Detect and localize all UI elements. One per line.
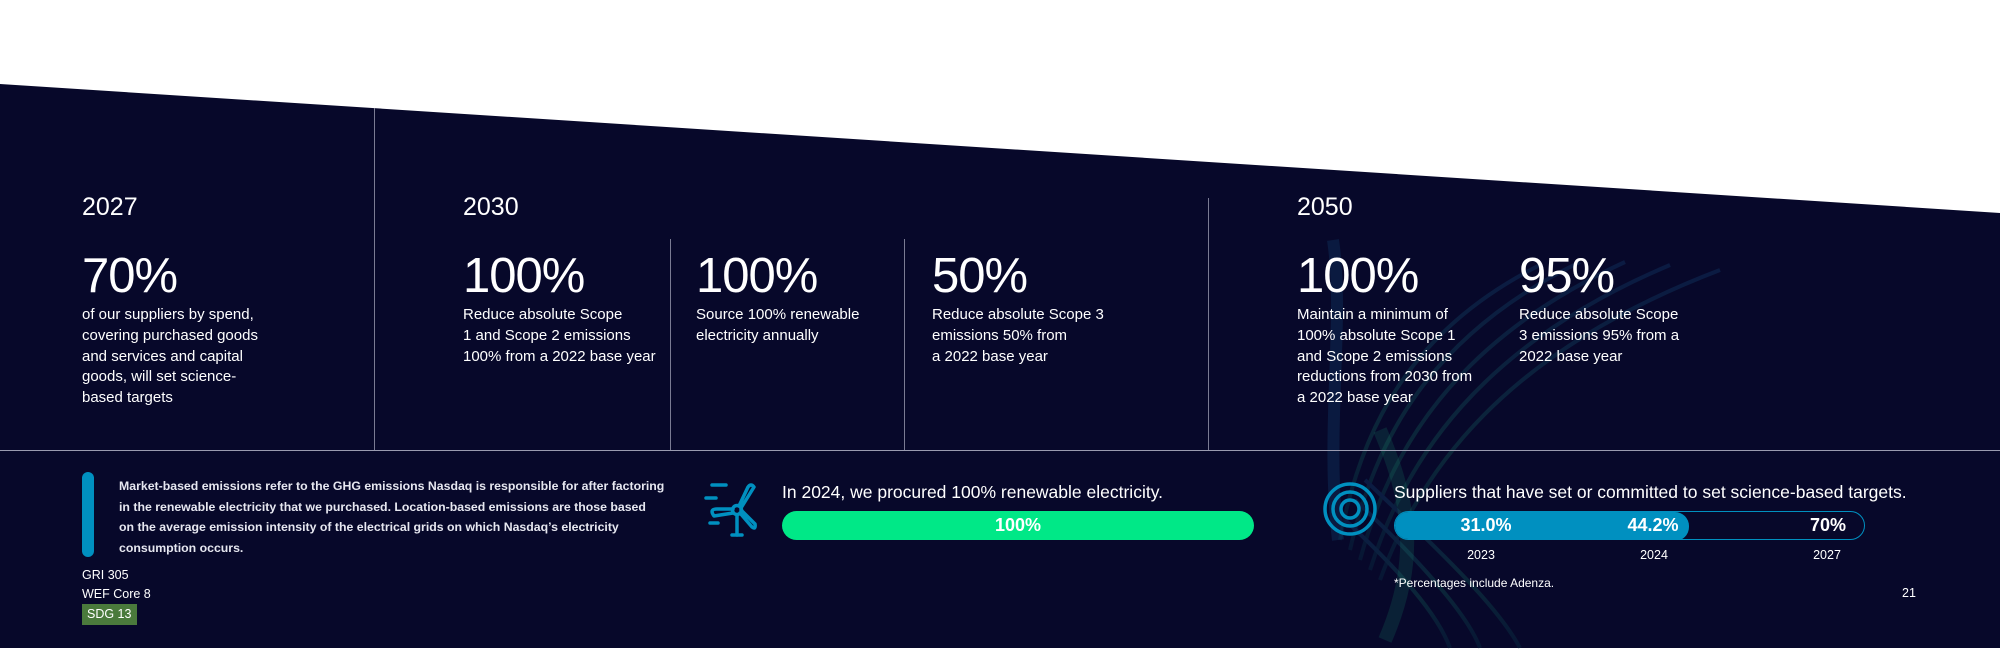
panel: 2050 [1297, 193, 1680, 406]
stat 100% scope 1&2: 1 and Scope 2 emissions [463, 327, 631, 344]
year 2050: 2050 [1297, 193, 1353, 221]
framework tags [82, 568, 151, 625]
panel: 2030 [463, 193, 1104, 365]
stat 100% maintain: 100% absolute Scope 1 [1297, 327, 1455, 344]
progress bar: 31.0% [1460, 515, 1512, 535]
bar 100% [782, 511, 1254, 540]
bar 100%: 100% [995, 515, 1041, 535]
year 2027: 2027 [82, 193, 138, 221]
stat 100% scope 1&2: 100% from a 2022 base year [463, 348, 656, 365]
framework tags: WEF Core 8 [82, 587, 151, 601]
stat 100% scope 1&2: Reduce absolute Scope [463, 306, 622, 323]
stat 100% maintain: reductions from 2030 from [1297, 368, 1472, 385]
tag SDG 13 [82, 604, 137, 625]
footnote: *Percentages include Adenza. [1394, 576, 1554, 590]
stat 100% scope 1&2 [463, 249, 656, 365]
framework tags: GRI 305 [82, 568, 129, 582]
stat 70%: 70% [82, 249, 177, 303]
stat 100% renewable: Source 100% renewable [696, 306, 859, 323]
stat 100% maintain: Maintain a minimum of [1297, 306, 1448, 323]
text 2027: based targets [82, 389, 173, 406]
text 2027 [82, 306, 258, 406]
chart: renewable electricity [782, 482, 1254, 540]
callout: market-based note: consumption occurs. [119, 540, 243, 554]
year 2030: 2030 [463, 193, 519, 221]
stat 100% maintain [1297, 249, 1472, 406]
stat 100% maintain: a 2022 base year [1297, 389, 1413, 406]
callout: market-based note: in the renewable electricity that we purchased. Location-based emissions are those based [119, 500, 646, 514]
callout: market-based note: Market-based emissions refer to the GHG emissions Nasdaq is responsible for after factoring [119, 479, 664, 493]
stat 95%: 3 emissions 95% from a [1519, 327, 1679, 344]
page number: 21 [1902, 586, 1916, 600]
stat 95%: 95% [1519, 249, 1614, 303]
stat 50% scope 3: 50% [932, 249, 1027, 303]
stat 50% scope 3 [932, 249, 1104, 365]
dividers [374, 108, 375, 450]
chart: renewable electricity: In 2024, we procured 100% renewable electricity. [782, 482, 1163, 502]
chart: supplier science-based targets [1394, 482, 1907, 590]
stat 50% scope 3: a 2022 base year [932, 348, 1048, 365]
progress bar: 70% [1810, 515, 1846, 535]
stat 100% maintain: 100% [1297, 249, 1418, 303]
progress bar [1394, 511, 1865, 540]
year labels: 2023 [1467, 548, 1495, 562]
stat 95%: 2022 base year [1519, 348, 1622, 365]
text 2027: and services and capital [82, 348, 243, 365]
chart: supplier science-based targets: 2024 [1640, 548, 1668, 562]
stat 100% renewable: 100% [696, 249, 817, 303]
stat 100% maintain: and Scope 2 emissions [1297, 348, 1452, 365]
stat 95% [1519, 249, 1680, 365]
stat 95%: Reduce absolute Scope [1519, 306, 1678, 323]
progress bar: 44.2% [1627, 515, 1679, 535]
panel: 2027 [82, 193, 258, 406]
callout: market-based note [82, 472, 664, 557]
chart: supplier science-based targets: Suppliers that have set or committed to set science-based targets. [1394, 482, 1907, 502]
stat 100% scope 1&2: 100% [463, 249, 584, 303]
text 2027: of our suppliers by spend, [82, 306, 254, 323]
stat 100% renewable [696, 249, 859, 344]
text 2027: goods, will set science- [82, 368, 236, 385]
text 2027: covering purchased goods [82, 327, 258, 344]
stat 50% scope 3: emissions 50% from [932, 327, 1067, 344]
stat 100% renewable: electricity annually [696, 327, 819, 344]
stat 50% scope 3: Reduce absolute Scope 3 [932, 306, 1104, 323]
icon: target [1323, 482, 1377, 536]
chart: supplier science-based targets: 2027 [1813, 548, 1841, 562]
icon: wind turbine [704, 483, 757, 537]
callout: market-based note: on the average emission intensity of the electrical grids on which Nasdaq’s electricity [119, 520, 619, 534]
tag SDG 13: SDG 13 [87, 607, 131, 621]
